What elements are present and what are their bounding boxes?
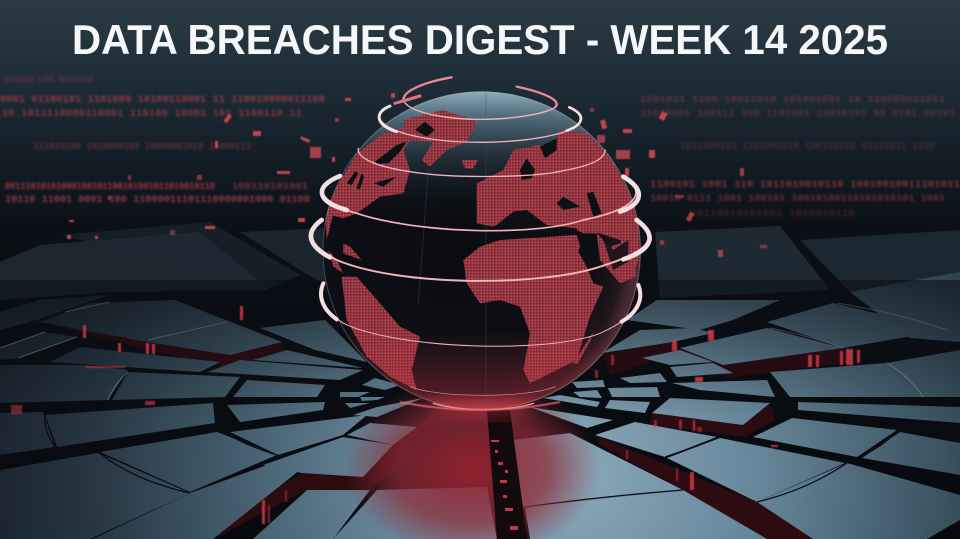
globe: bottom red reflection: [322, 91, 641, 410]
floor: glowing red crack marks: [11, 306, 860, 524]
title: DATA BREACHES DIGEST - WEEK 14 2025: [72, 16, 888, 63]
background binary text: left: 10110 11001 0001 100 11000011101110000001000 01100: [5, 195, 310, 206]
background binary text: right: 1001011 1100 10011010 101001001 10 110000011011: [640, 95, 945, 106]
background binary text: right: 1011000101 1101001010 100101010 01101011 1100: [680, 142, 935, 153]
globe: dark sphere: [322, 91, 641, 410]
floor: cracked steel tiles: [0, 272, 960, 539]
globe: dark lakes and seas: [347, 122, 628, 270]
background binary text: right: [640, 95, 960, 220]
background binary text: left: 10.1011110000110001 110100 10001 101 1100110.11: [2, 109, 302, 120]
background binary text: right: 10010 0111 1001 100101 10010100110101010101 1001: [650, 194, 945, 205]
background binary text: right: 11010001 100111 100 1101001 10010101 00 0101.00101: [640, 109, 955, 120]
floor: dark circuit strip with red speckles: [487, 410, 527, 539]
floor: red glow beneath globe: [344, 376, 600, 539]
rings: bright white ring ends and top arcs: [311, 77, 650, 322]
background binary text: left: 00111010101000100101100101001011010010110: [5, 182, 215, 193]
background binary text: right: 10110010101001 1010010110: [690, 209, 855, 220]
background binary text: left: [0, 75, 325, 206]
floor: top shade: [0, 280, 960, 420]
globe: meridian: [418, 93, 486, 407]
floor: extruded red-lit gaps: [30, 318, 850, 539]
background binary text: left: 1001010 1101 00110110: [2, 75, 94, 86]
globe: rim light: [323, 92, 640, 409]
floor: tile arcs and light streaks: [0, 302, 947, 507]
debris: flying red data fragments: [67, 93, 767, 257]
globe base glow: [400, 400, 560, 416]
background binary text: right: 1100101 1001 110 1011010010110 10010010011101011: [650, 180, 960, 191]
globe: red dotted continents: [325, 110, 640, 390]
background binary text: left: 100110101001: [232, 182, 308, 193]
background binary text: left: 0001 01100101 1101000 10100110001 11 110010000011100: [0, 95, 325, 106]
globe: glass cap highlight: [322, 91, 641, 410]
globe: [311, 77, 650, 410]
rings: thin glowing orbit lines: [311, 100, 649, 410]
floor: far dim tiles: [0, 222, 960, 330]
background binary text: left: 111010100 1010000100 10000001010 11000111: [33, 142, 251, 153]
